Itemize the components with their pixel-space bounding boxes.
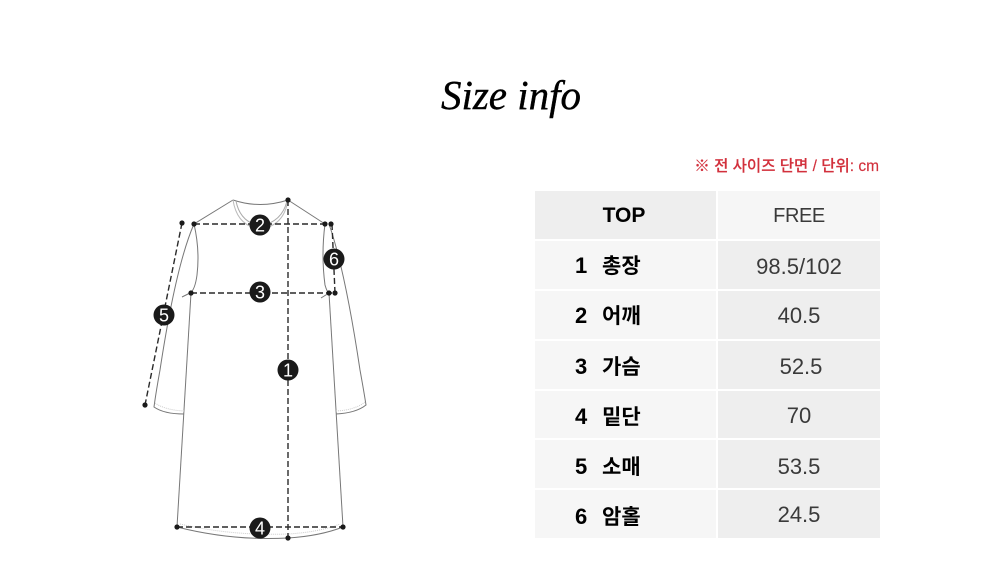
badge 2: 2 [255,216,265,236]
row 2 value [718,291,880,339]
note: measurement unit: ※ 전 사이즈 단면 / 단위: cm [694,158,879,175]
row 6 label: 암홀 [602,506,641,529]
row 5 value: 53.5 [778,454,820,479]
row 5 label: 소매 [602,456,641,479]
title: Size info [441,72,581,118]
row 3 value: 52.5 [780,354,822,379]
row 2 label [535,291,716,339]
row 6 label [535,490,716,538]
row 6 label: 6 [575,504,587,529]
row 4 value [718,391,880,438]
row 1 label [535,241,716,289]
badge 1: 1 [283,360,293,380]
row 6 value [718,490,880,538]
badge 1 [278,360,298,380]
badge 3: 3 [255,282,265,302]
row 4 value: 70 [787,402,811,428]
row 2 value: 40.5 [778,303,820,328]
row 4 label: 밑단 [602,406,641,428]
row 3 label: 3 [575,354,587,379]
badge 6: 6 [329,250,339,270]
row 2 label: 2 [575,303,587,328]
header: TOP [535,191,716,239]
row 6 value: 24.5 [778,502,820,527]
badge 4 [250,518,270,538]
row 1 value: 98.5/102 [756,254,842,279]
badge 4: 4 [255,518,265,538]
row 3 value [718,341,880,389]
garment outline [154,200,366,539]
measurement dashed lines [145,200,343,538]
badge 2 [250,214,270,236]
badge 5: 5 [159,306,169,326]
header: FREE [718,191,880,239]
row 3 label [535,341,716,389]
row 4 label [535,391,716,438]
header: FREE: FREE [773,204,825,226]
row 5 value [718,440,880,488]
row 1 label: 총장 [602,255,641,278]
row 4 label: 4 [575,404,587,428]
row 5 label: 5 [575,454,587,479]
row 5 label [535,440,716,488]
header: TOP: TOP [603,204,645,227]
badge 5 [154,304,174,326]
row 1 label: 1 [575,253,587,278]
measurement end points [142,197,346,541]
row 2 label: 어깨 [602,305,641,328]
row 1 value [718,241,880,289]
row 3 label: 가슴 [602,356,641,379]
badge 3 [250,282,270,302]
badge 6 [324,248,344,270]
